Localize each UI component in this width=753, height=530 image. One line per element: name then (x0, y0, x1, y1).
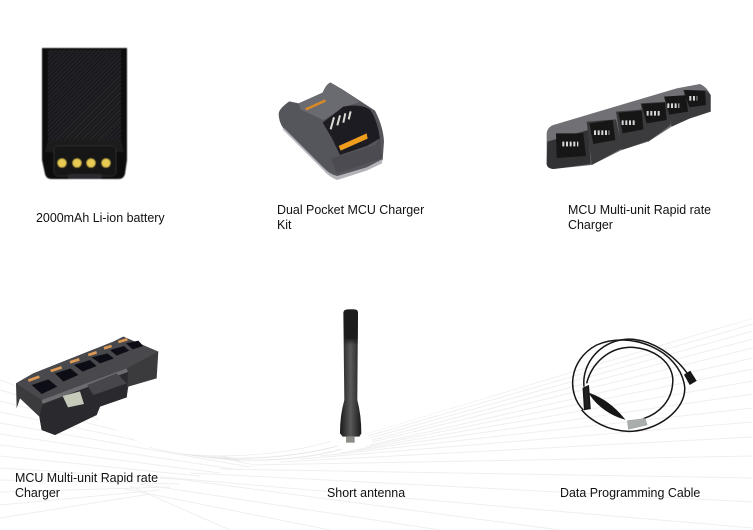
label: dual pocket charger: Dual Pocket MCU Charger (277, 203, 424, 217)
label: desktop charger (15, 471, 158, 500)
label: six-bay charger: Charger (568, 218, 613, 232)
label: dual pocket charger: Kit (277, 218, 292, 232)
label: dual pocket charger (277, 203, 424, 232)
icon: battery (42, 48, 127, 179)
icon: dual pocket charger (279, 83, 384, 180)
background: wave line pattern (0, 318, 753, 530)
label: six-bay charger: MCU Multi-unit Rapid rate (568, 203, 711, 217)
label: six-bay charger (568, 203, 711, 232)
icon: data programming cable (573, 339, 696, 431)
label: desktop charger: MCU Multi-unit Rapid rate (15, 471, 158, 485)
icon: six-bay multi-unit charger (547, 84, 711, 169)
label: desktop charger: Charger (15, 486, 60, 500)
label: data programming cable: Data Programming Cable (560, 486, 700, 500)
label: battery: 2000mAh Li-ion battery (36, 211, 165, 225)
label: short antenna: Short antenna (327, 486, 405, 500)
icon: desktop multi-unit rapid rate charger (16, 337, 158, 435)
icon: short antenna (340, 309, 361, 443)
